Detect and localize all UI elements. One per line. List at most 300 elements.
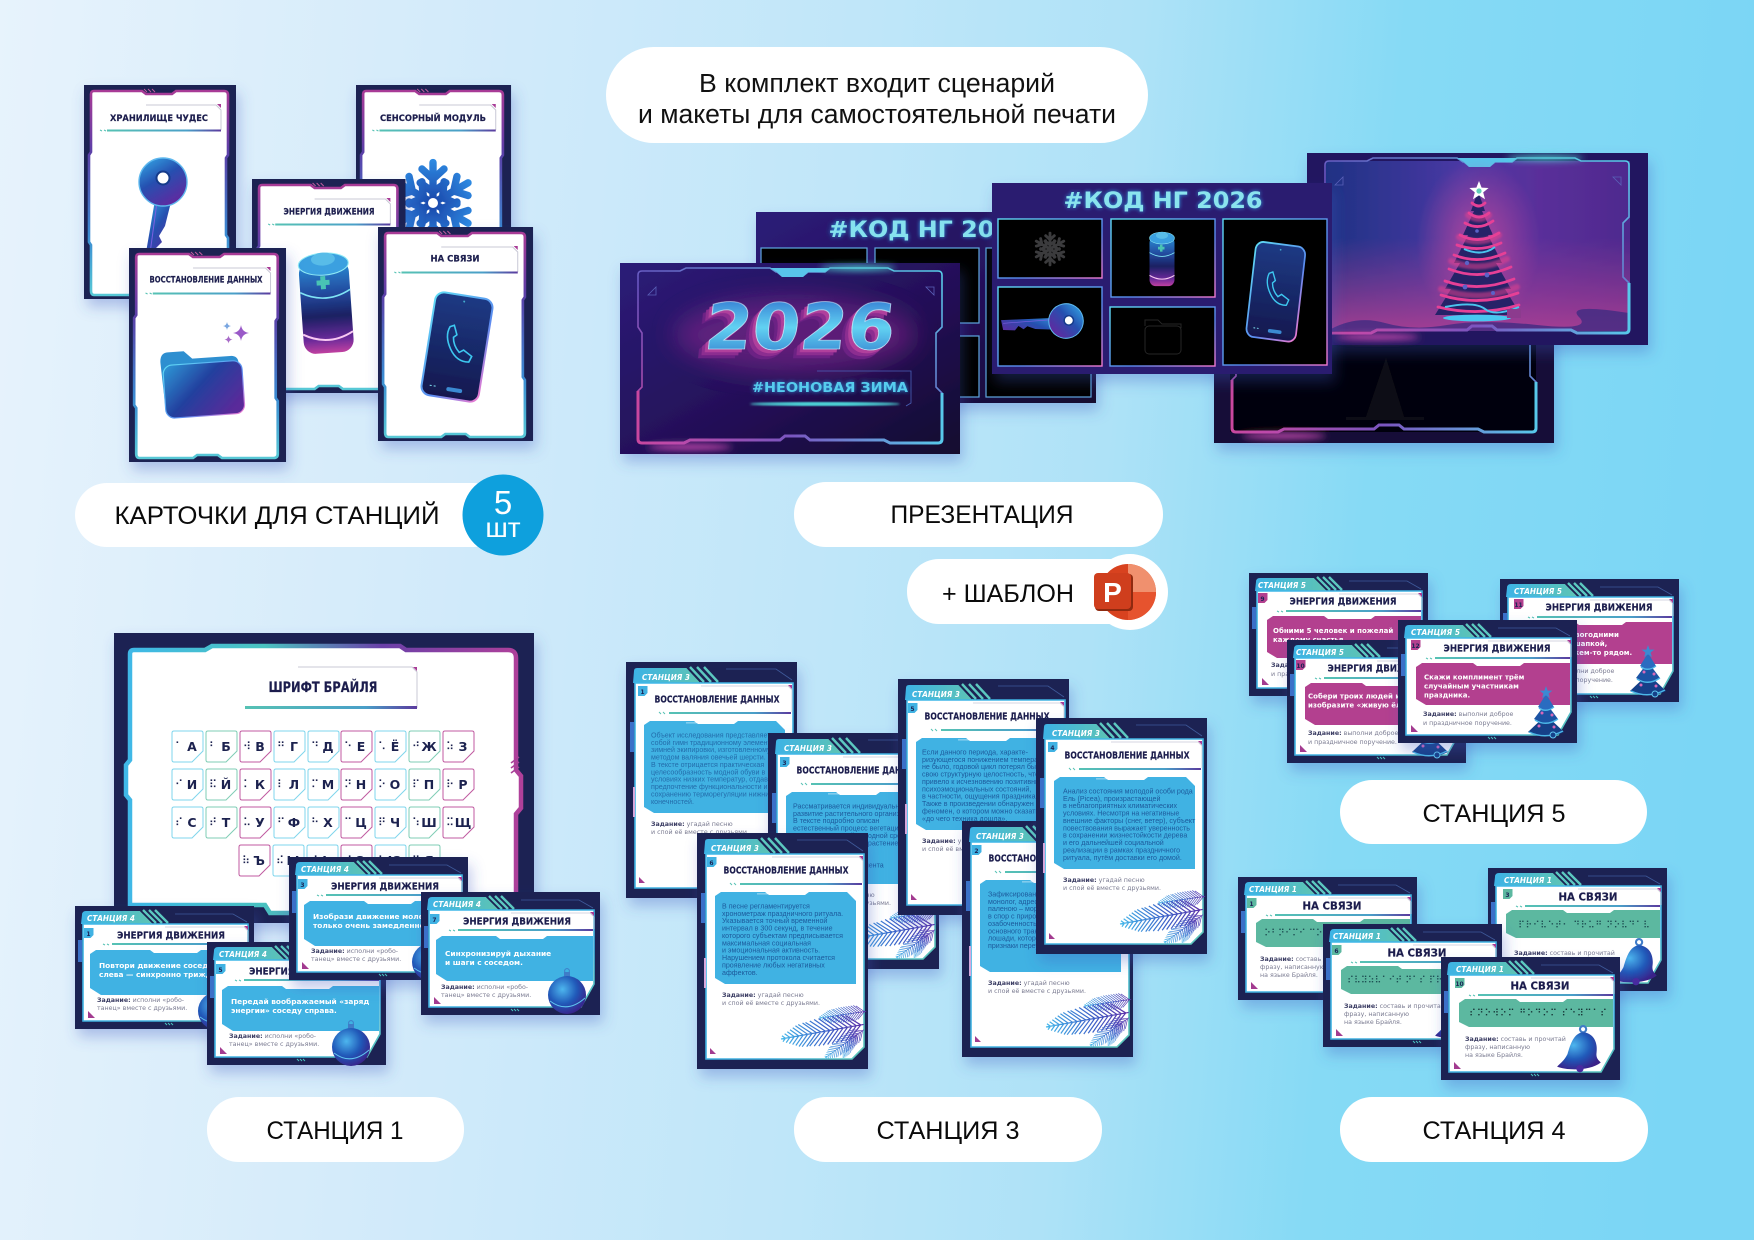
card: snowflake (356, 85, 511, 299)
card 2: СТАНЦИЯ 3 (976, 832, 1024, 841)
alphabet grid: Ч (390, 815, 400, 830)
alphabet grid: Г (290, 739, 298, 754)
alphabet grid: Т (222, 815, 231, 830)
card 4: Анализ состояния молодой особи рода (1063, 788, 1193, 796)
card 1 (1238, 877, 1417, 1000)
alphabet grid: А (187, 739, 197, 754)
card 5: СТАНЦИЯ 4 (219, 950, 267, 959)
card 2: ВОССТАНОВЛЕНИЕ ДАННЫХ (988, 854, 1114, 864)
card 6: НА СВЯЗИ (1388, 948, 1446, 960)
card 10 (1287, 640, 1466, 763)
label: cards pill with count (75, 474, 544, 556)
card 1: В тексте отрицается практическая (651, 761, 764, 769)
alphabet grid: ⠋ (277, 816, 285, 829)
card: folder (129, 248, 286, 462)
card 6: и эмоциональная активность. (722, 947, 820, 955)
panel: station 3 cards (626, 662, 1208, 1069)
card 2: монолог, адресованный (988, 898, 1066, 906)
card 1: СТАНЦИЯ 1 (1249, 885, 1297, 894)
icon: dim folder (1145, 320, 1181, 354)
alphabet grid: Я (424, 853, 434, 868)
card 5: ризующегося понижением температур, (922, 756, 1051, 764)
alphabet grid: ⠎ (175, 816, 183, 829)
card 10: 10 (1455, 981, 1464, 988)
card 5: энергии» соседу справа. (231, 1006, 337, 1015)
alphabet grid: ⠙ (311, 740, 319, 753)
card 1: 1 (640, 689, 645, 696)
card 7: и шаги с соседом. (445, 958, 523, 967)
card 1: фразу, написанную (1260, 964, 1325, 971)
card 6: В песне регламентируется (722, 902, 810, 910)
alphabet grid: Ж (421, 739, 437, 754)
alphabet grid: ⠪ (344, 854, 352, 867)
card 5: в частности, ощущения праздника. (922, 793, 1038, 801)
card 1: предпочтение функциональности и (651, 783, 768, 791)
card 10 (1441, 957, 1620, 1080)
card 4: внешние факторы (снег, ветер), субъект (1063, 817, 1196, 825)
card 5: свою структурную целостность, что (922, 771, 1039, 779)
card 5: 5 (218, 967, 223, 974)
card 3: СТАНЦИЯ 3 (784, 744, 832, 753)
card 5: и спой её вместе с друзьями. (922, 845, 1020, 853)
card 6: Задание: угадай песню (722, 991, 804, 999)
year 2026: 2026 (701, 290, 899, 365)
card 6: Указывается точный временной (722, 917, 827, 925)
card 10: ЭНЕРГИЯ ДВИЖЕНИЯ (1328, 664, 1434, 674)
card 5: Также в произведении обнаружен (922, 800, 1034, 808)
card 3: естественный процесс вегетации (793, 825, 903, 833)
alphabet grid: Х (323, 815, 333, 830)
card 12: Задание: выполни доброе (1423, 710, 1513, 718)
card 1: СТАНЦИЯ 4 (87, 914, 135, 923)
card 7: Задание: исполни «робо- (441, 983, 528, 991)
card 1: Повтори движение соседа (99, 961, 213, 970)
card 5: танец» вместе с друзьями. (229, 1041, 319, 1048)
card 3: праздничного ритуала (793, 869, 866, 877)
label: presentation pill: ПРЕЗЕНТАЦИЯ (890, 501, 1074, 529)
card 10: и праздничное поручение. (1308, 739, 1397, 746)
card 12: СТАНЦИЯ 5 (1411, 628, 1461, 637)
alphabet grid: О (390, 777, 400, 792)
card 7: 7 (432, 917, 437, 924)
card 5: не было, годовой цикл потерял бы (922, 763, 1036, 771)
card 3: только очень замедленно. (313, 921, 428, 930)
alphabet grid: Б (221, 739, 231, 754)
alphabet grid: Ц (355, 815, 367, 830)
card 2: озабоченность вызывает (988, 920, 1071, 928)
card 9: каждому счастья. (1273, 636, 1346, 644)
alphabet grid: ⠟ (378, 816, 386, 829)
card 1: зимней экипировки, изготовленному (651, 746, 771, 754)
card 7: ЭНЕРГИЯ ДВИЖЕНИЯ (463, 916, 571, 928)
alphabet grid: М (322, 777, 334, 792)
card 3: и последующий отбор растением, (793, 839, 905, 847)
card 1: 1 (1249, 901, 1254, 908)
card 7: СТАНЦИЯ 4 (433, 900, 481, 909)
card 11: СТАНЦИЯ 5 (1514, 587, 1563, 596)
card 11: Украсься новогодними (1526, 631, 1619, 639)
alphabet grid: ⠫ (412, 854, 420, 867)
card 4: Задание: угадай песню (1063, 876, 1145, 884)
label: station 3 pill: СТАНЦИЯ 3 (876, 1117, 1020, 1145)
card 3: ЭНЕРГИЯ ДВИЖЕНИЯ (331, 882, 439, 892)
alphabet grid: ⠃ (209, 740, 217, 753)
alphabet grid: ⠝ (344, 778, 352, 791)
card 5: феномен, о котором можно сказать: (922, 807, 1041, 815)
alphabet grid: ⠯ (209, 778, 217, 791)
alphabet grid: Ъ (253, 853, 265, 868)
alphabet grid: ⠑ (344, 740, 352, 753)
alphabet grid: Е (357, 739, 365, 754)
alphabet grid: Ш (421, 815, 437, 830)
card 7: Синхронизируй дыхание (445, 949, 551, 958)
icon: battery (1150, 232, 1174, 286)
card: key: ХРАНИЛИЩЕ ЧУДЕС (110, 113, 208, 124)
label: station 4 pill: СТАНЦИЯ 4 (1422, 1117, 1566, 1145)
alphabet grid: ⠮ (276, 854, 284, 867)
card 12: случайным участникам (1424, 682, 1519, 690)
slide: dark tree (1214, 252, 1554, 443)
card 3: и размещение в среде (793, 854, 867, 862)
alphabet grid: Ь (322, 853, 332, 868)
alphabet grid: ⠇ (277, 778, 285, 791)
alphabet grid: Э (356, 853, 366, 868)
card 4: СТАНЦИЯ 3 (1052, 729, 1100, 738)
card 12: и праздничное поручение. (1423, 720, 1512, 727)
alphabet grid: ⠊ (175, 778, 183, 791)
slide: 2026 title (620, 263, 960, 454)
card 1: ЭНЕРГИЯ ДВИЖЕНИЯ (117, 930, 225, 942)
card 3: в условиях лесной холодной среды (793, 832, 910, 840)
card 9: 9 (1260, 596, 1265, 603)
card: phone (378, 227, 533, 441)
card 1: методом валяния овечьей шерсти. (651, 754, 766, 762)
card 5: Если данного периода, характе- (922, 748, 1029, 756)
card 2: 2 (974, 848, 979, 855)
card 5 (898, 679, 1070, 915)
alphabet grid: ⠳ (378, 854, 386, 867)
card 1: условиях низких температур, отдавая (651, 776, 776, 784)
slide: code grid front: #КОД НГ 2026 (1064, 189, 1262, 214)
card 5: психоэмоциональных состояний, (922, 785, 1031, 793)
card 3: Задание: исполни «робо- (311, 947, 398, 955)
alphabet grid: Р (458, 777, 468, 792)
panel: scenario note pill: и макеты для самостоятельной печати (638, 101, 1116, 129)
alphabet grid: ⠺ (243, 740, 251, 753)
card 3: развитие растительного организма. (793, 810, 911, 818)
card 6: СТАНЦИЯ 3 (711, 844, 759, 853)
card 10: СТАНЦИЯ 5 (1296, 648, 1345, 657)
alphabet grid: ⠍ (311, 778, 319, 791)
label: station 1 pill (207, 1097, 464, 1162)
alphabet grid: ⠥ (243, 816, 251, 829)
card: folder: ВОССТАНОВЛЕНИЕ ДАННЫХ (150, 274, 263, 284)
card 6: на языке Брайля. (1344, 1018, 1402, 1026)
card 10: Задание: составь и прочитай (1465, 1035, 1566, 1043)
card: phone: НА СВЯЗИ (430, 254, 480, 264)
card 1: собой гимн традиционному элементу (651, 739, 775, 747)
card 10: на языке Брайля. (1465, 1051, 1523, 1059)
card 5: Задание: угадай песню (922, 837, 1004, 845)
card 4: в неблагоприятных климатических (1063, 802, 1178, 810)
card 9: Задание: выполни доброе (1271, 661, 1361, 669)
card 6: аффектов. (722, 969, 758, 977)
card 3 (1488, 868, 1667, 991)
card 3: и спой её вместе с друзьями. (793, 899, 891, 907)
card 3: Рассматривается индивидуальное (793, 802, 907, 810)
card 4: условиях. Несмотря на негативные (1063, 810, 1179, 818)
card 11: ЭНЕРГИЯ ДВИЖЕНИЯ (1546, 602, 1652, 614)
card 5: привело к исчезновению позитивных (922, 778, 1044, 786)
label: presentation pill (794, 482, 1163, 547)
panel: station cards set (84, 85, 533, 462)
card 1: Объект исследования представляет (651, 732, 771, 740)
alphabet grid: ⠏ (412, 778, 420, 791)
alphabet grid: ⠵ (446, 740, 454, 753)
card 5: Задание: исполни «робо- (229, 1032, 316, 1040)
card 4: и спой её вместе с друзьями. (1063, 884, 1161, 892)
card 4 (1036, 718, 1208, 954)
card 12: 12 (1411, 643, 1420, 650)
card 6: Задание: составь и прочитай (1344, 1002, 1445, 1010)
alphabet grid: Ё (391, 739, 399, 754)
alphabet grid: ⠁ (175, 740, 183, 753)
card 12: ЭНЕРГИЯ ДВИЖЕНИЯ (1444, 644, 1550, 654)
card 6: интервал в 300 секунд, в течение (722, 925, 833, 933)
icon: PowerPoint (1094, 564, 1156, 620)
card 5: ВОССТАНОВЛЕНИЕ ДАННЫХ (924, 712, 1050, 722)
card 11: 11 (1514, 602, 1523, 609)
label: station 1 pill: СТАНЦИЯ 1 (266, 1117, 404, 1145)
panel: braille alphabet (114, 633, 534, 923)
panel: station 5 cards (1249, 573, 1679, 763)
card 4: реализации в рамках праздничного (1063, 846, 1180, 854)
card 6: Нарушением протокола считается (722, 954, 835, 962)
alphabet grid: Й (221, 777, 231, 792)
icon: key (1000, 301, 1086, 351)
alphabet grid: ⠗ (446, 778, 454, 791)
card 6 (1323, 924, 1502, 1047)
card 7 (421, 892, 600, 1015)
alphabet grid: Л (289, 777, 299, 792)
card 4: 4 (1050, 745, 1055, 752)
card 3: Изобрази движение молекулы, (313, 912, 449, 921)
card 2: и спой её вместе с друзьями. (988, 987, 1086, 995)
card 1: сохранению терморегуляции нижних (651, 790, 773, 798)
card 12: Скажи комплимент трём (1424, 674, 1525, 682)
badge: 5 pieces: 5 (494, 484, 512, 521)
card 4: ВОССТАНОВЛЕНИЕ ДАННЫХ (1064, 750, 1190, 762)
braille heading: ШРИФТ БРАЙЛЯ (268, 679, 378, 696)
card 9: СТАНЦИЯ 5 (1258, 581, 1307, 590)
card 4: в сохранении жизнестойкости дерева (1063, 832, 1187, 840)
card 3 (768, 733, 940, 969)
card 2: основного транспорта — (988, 927, 1071, 935)
card 10: ⠎⠝⠕⠺⠕⠍ ⠛⠕⠙⠕⠍ ⠎⠑⠽⠉⠁⠎ (1469, 1008, 1607, 1019)
card 1: конечностей. (651, 798, 694, 806)
card 10: 10 (1296, 663, 1305, 670)
alphabet grid: Д (322, 739, 334, 754)
card 6: 6 (709, 860, 714, 867)
alphabet grid: ⠓ (311, 816, 319, 829)
card 1: ВОССТАНОВЛЕНИЕ ДАННЫХ (654, 694, 780, 706)
alphabet grid: ⠡ (378, 740, 386, 753)
card 6 (697, 833, 869, 1069)
card 1: Задание: угадай песню (651, 820, 733, 828)
card 1 (626, 662, 798, 898)
card 5: СТАНЦИЯ 3 (912, 690, 960, 699)
label: template pill with PowerPoint icon (907, 554, 1168, 630)
card 6: СТАНЦИЯ 1 (1333, 932, 1381, 941)
card 1: СТАНЦИЯ 3 (642, 673, 690, 682)
card 9 (1249, 573, 1428, 696)
card 1: на языке Брайля. (1260, 971, 1318, 979)
card 1: ⠕⠃⠝⠊⠍⠊ ⠉⠕⠎⠑ (1264, 928, 1337, 939)
alphabet grid: ⠭ (446, 816, 454, 829)
slide: code grid front (992, 183, 1332, 374)
alphabet grid: И (187, 777, 197, 792)
panel: scenario note pill: В комплект входит сценарий (699, 70, 1055, 98)
card: key (84, 85, 236, 299)
card 3: его транспортировка (793, 847, 862, 855)
label: station 5 pill: СТАНЦИЯ 5 (1422, 800, 1566, 828)
card 2: в спор с природой. (988, 913, 1050, 921)
badge: 5 pieces (462, 474, 544, 556)
slide: code grid back (756, 212, 1096, 403)
card 6: ⠎⠧⠽⠵⠧⠁⠊⠞ ⠝⠁⠎ ⠏⠗⠁⠵⠝⠊⠅ (1347, 975, 1477, 986)
card 5: Передай воображаемый «заряд (231, 997, 369, 1006)
card 3: как центрального элемента (793, 861, 884, 869)
card 1: Задание: исполни «робо- (97, 996, 184, 1004)
card 1: и спой её вместе с друзьями. (651, 828, 749, 836)
alphabet grid: П (424, 777, 434, 792)
card 3: 3 (782, 760, 787, 767)
alphabet grid: У (255, 815, 265, 830)
alphabet grid: С (187, 815, 197, 830)
alphabet grid: Н (356, 777, 366, 792)
card 9: и праздничное поручение. (1271, 671, 1360, 678)
icon: phone (1246, 241, 1306, 342)
card 2: признаки переутомления. (988, 942, 1073, 950)
panel: station 4 cards (1238, 868, 1667, 1080)
braille heading (245, 667, 417, 709)
alphabet grid: К (255, 777, 266, 792)
card 12: праздника. (1424, 692, 1470, 700)
card 4: и его дальнейшей социальной (1063, 839, 1164, 847)
label: station 3 pill (794, 1097, 1102, 1162)
card 3: НА СВЯЗИ (1558, 892, 1618, 904)
card 1: целесообразность модной обуви в (651, 768, 765, 776)
card 3: В тексте подробно описан (793, 817, 879, 825)
card 10: изобразите «живую ёлку». (1308, 702, 1418, 710)
card 6: 6 (1334, 948, 1339, 955)
card 11: гирляндой) и кем-то рядом. (1518, 649, 1632, 657)
card 6: ВОССТАНОВЛЕНИЕ ДАННЫХ (724, 866, 849, 876)
card 11: и праздничное поручение. (1524, 677, 1613, 684)
card 3: 3 (1505, 892, 1510, 899)
alphabet grid: ⠛ (277, 740, 285, 753)
alphabet grid: З (459, 739, 468, 754)
card 10: фразу, написанную (1465, 1044, 1530, 1051)
panel: station 1 cards (75, 857, 600, 1066)
card 6: максимальная социальная (722, 939, 811, 947)
card: battery (252, 179, 406, 393)
card 2: лошади, которая проявляет (988, 935, 1081, 943)
card 3: 3 (300, 882, 305, 889)
card 1: танец» вместе с друзьями. (97, 1005, 187, 1012)
card 11: атрибутами (шапкой, (1520, 640, 1607, 648)
card: battery: ЭНЕРГИЯ ДВИЖЕНИЯ (284, 206, 374, 216)
alphabet grid: Ы (287, 853, 299, 868)
card 1: слева — синхронно трижды. (99, 970, 221, 979)
card 10: СТАНЦИЯ 1 (1456, 965, 1504, 974)
card 3: ⠏⠗⠊⠧⠑⠞⠂ ⠙⠗⠥⠛ ⠝⠕⠧⠙⠁⠧ (1518, 920, 1650, 931)
presentation slides (620, 153, 1648, 454)
card 10: Собери троих людей и (1308, 692, 1400, 700)
card 2 (962, 821, 1134, 1057)
card 9: Обними 5 человек и пожелай (1273, 627, 1393, 635)
alphabet grid: ⠾ (310, 854, 318, 867)
card 6: хронометраж праздничного ритуала. (722, 910, 843, 918)
card 3: СТАНЦИЯ 4 (301, 865, 349, 874)
card 5 (207, 942, 386, 1066)
card 1: НА СВЯЗИ (1302, 900, 1362, 912)
card 3: Задание: составь и прочитай (1514, 949, 1615, 957)
alphabet grid: ⠉ (344, 816, 352, 829)
card 10: НА СВЯЗИ (1510, 980, 1570, 992)
alphabet grid: ⠷ (242, 854, 250, 867)
alphabet grid: Ф (288, 815, 300, 830)
alphabet grid: ⠅ (243, 778, 251, 791)
alphabet grid (172, 731, 474, 876)
badge: 5 pieces: шт (485, 512, 521, 543)
card 6: и спой её вместе с друзьями. (722, 999, 820, 1007)
alphabet grid: В (255, 739, 265, 754)
label: station 5 pill (1340, 780, 1647, 844)
card 3: Задание: угадай песню (793, 891, 875, 899)
alphabet grid: Щ (455, 815, 471, 830)
card 4: Ель (Picea), произрастающей (1063, 795, 1160, 803)
card 3: ВОССТАНОВЛЕНИЕ ДАННЫХ (796, 766, 922, 776)
card 3 (289, 857, 468, 981)
card 7: танец» вместе с друзьями. (441, 992, 531, 999)
card 12 (1398, 620, 1577, 743)
card 11 (1500, 579, 1679, 702)
card 2: Зафиксирован лирический (988, 890, 1076, 898)
label: cards pill with count: КАРТОЧКИ ДЛЯ СТАНЦИЙ (114, 500, 440, 530)
card 10: Задание: выполни доброе (1308, 729, 1398, 737)
hashtag (750, 371, 911, 406)
card 1 (75, 906, 254, 1030)
alphabet grid: ⠱ (412, 816, 420, 829)
card 6: фразу, написанную (1344, 1011, 1409, 1018)
card 1: 1 (86, 931, 91, 938)
card 4: ритуала, путём доставки его домой. (1063, 854, 1182, 862)
card 1: Задание: составь и прочитай (1260, 955, 1361, 963)
slide: code grid back: #КОД НГ 2026 (828, 218, 1028, 243)
card 5: ЭНЕРГИЯ ДВИЖЕНИЯ (249, 966, 357, 978)
card 2: Задание: угадай песню (988, 979, 1070, 987)
card 3: танец» вместе с друзьями. (311, 956, 401, 963)
alphabet grid: ⠚ (412, 740, 420, 753)
card 5: «до чего техника дошла». (922, 815, 1007, 823)
card 6: которого субъектам предписывается (722, 932, 843, 940)
icon: PowerPoint: P (1103, 577, 1122, 608)
label: template pill with PowerPoint icon: + ШАБЛОН (942, 580, 1074, 608)
card 6: проявление любых негативных (722, 961, 825, 969)
card 11: Задание: выполни доброе (1524, 667, 1614, 675)
card 5: 5 (910, 706, 915, 713)
